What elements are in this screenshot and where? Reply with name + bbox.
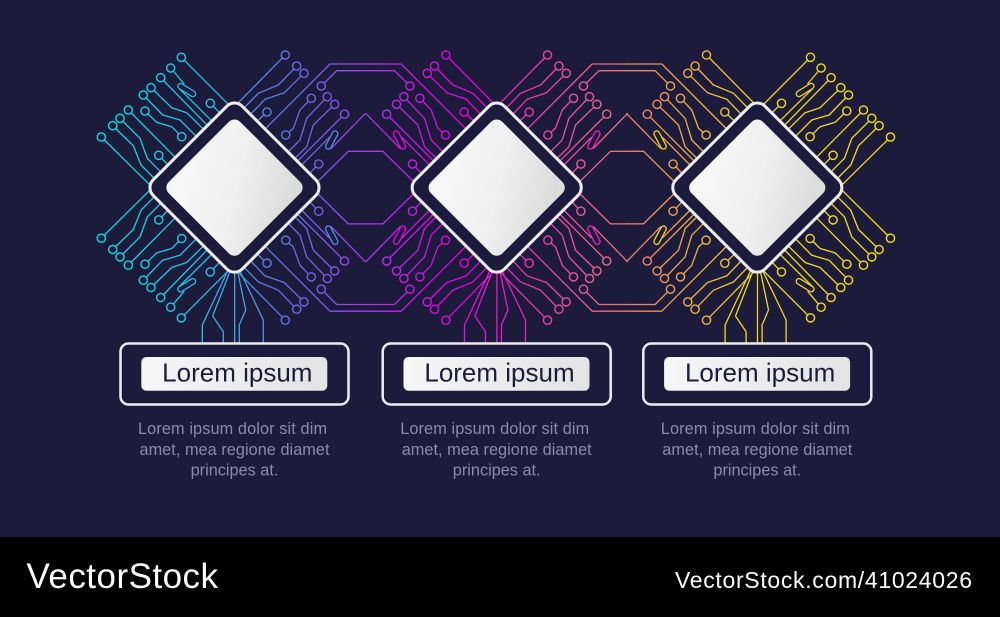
connector traces: chip 2 to label bbox=[464, 270, 526, 343]
panel: column 2 label and text: Lorem ipsum bbox=[424, 358, 575, 388]
panel: column 1 label and text: amet, mea regione diamet bbox=[140, 441, 330, 459]
panel: column 3 label and text: Lorem ipsum dolor sit dim bbox=[661, 420, 850, 438]
panel: column 1 label and text: Lorem ipsum bbox=[162, 358, 312, 388]
watermark band bbox=[0, 537, 1000, 617]
chip diamond 2 bbox=[408, 99, 586, 277]
panel: column 1 label and text: principes at. bbox=[191, 462, 278, 480]
panel: column 1 label and text bbox=[120, 344, 348, 480]
connector traces: chip 3 to label bbox=[725, 270, 786, 343]
watermark band: VectorStock bbox=[26, 557, 218, 596]
panel: column 3 label and text: Lorem ipsum bbox=[685, 358, 835, 388]
panel: column 2 label and text: principes at. bbox=[453, 462, 541, 480]
watermark band: VectorStock.com/41024026 bbox=[675, 567, 972, 593]
panel: column 2 label and text: Lorem ipsum dolor sit dim bbox=[400, 420, 589, 438]
connector traces: chip 1 to label bbox=[202, 270, 263, 343]
panel: column 3 label and text: principes at. bbox=[713, 462, 801, 480]
panel: column 1 label and text: Lorem ipsum dolor sit dim bbox=[138, 420, 327, 438]
circuit traces: cyan left of chip 1 bbox=[97, 53, 232, 322]
circuit traces: pink to orange between chips 2 and 3 bbox=[498, 51, 756, 324]
panel: column 2 label and text bbox=[383, 344, 611, 480]
circuit traces: yellow right of chip 3 bbox=[760, 53, 895, 322]
chip diamond 1 bbox=[145, 99, 324, 277]
chip diamond 3 bbox=[668, 99, 846, 277]
panel: column 3 label and text: amet, mea regione diamet bbox=[662, 441, 853, 459]
panel: column 3 label and text bbox=[643, 344, 871, 480]
circuit traces: blue to purple between chips 1 and 2 bbox=[236, 51, 496, 324]
panel: column 2 label and text: amet, mea regione diamet bbox=[402, 441, 592, 459]
